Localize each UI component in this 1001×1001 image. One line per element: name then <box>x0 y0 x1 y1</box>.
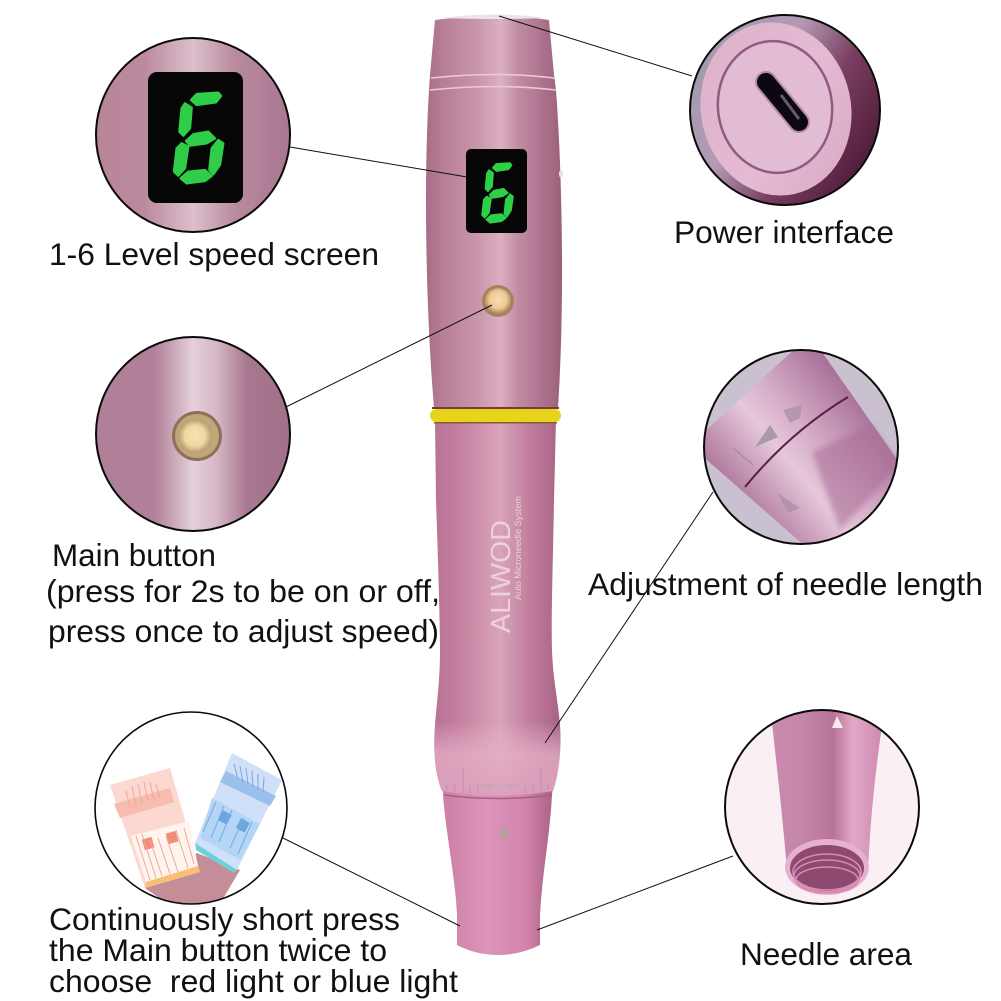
collar seam <box>444 795 552 798</box>
leader lines <box>283 16 733 930</box>
brand logo <box>485 496 524 633</box>
callout: needle length adjustment magnifier <box>703 349 899 545</box>
label: light selection: the Main button twice to <box>49 932 387 968</box>
adjustment collar highlight <box>434 722 561 796</box>
label: speed screen: 1-6 Level speed screen <box>49 236 379 272</box>
label: light selection: Continuously short press <box>49 901 400 937</box>
scale tick <box>733 448 753 465</box>
label: main button: Main button <box>52 537 216 573</box>
callout: main button magnifier <box>96 337 290 531</box>
label: main button: press once to adjust speed) <box>48 613 439 649</box>
red cartridge <box>110 768 200 888</box>
inner ring <box>716 40 834 174</box>
enlarged display <box>148 72 243 203</box>
callout: red and blue light cartridges <box>95 712 287 906</box>
main button on pen <box>482 285 514 317</box>
shaded lower band <box>812 425 900 530</box>
pen upper body <box>426 16 562 408</box>
tilted pen body <box>705 351 896 543</box>
digit 6 <box>482 163 513 223</box>
groove <box>745 397 848 487</box>
label: needle length adjustment: Adjustment of needle length <box>588 566 983 602</box>
label: light selection: choose red light or blue light <box>49 963 458 999</box>
length scale marks <box>447 768 548 794</box>
handles <box>145 853 240 906</box>
yellow rubber ring <box>430 407 561 424</box>
direction triangles <box>755 425 778 447</box>
callout: needle area magnifier <box>725 705 919 904</box>
label: light selection <box>49 901 458 999</box>
enlarged digit 6 <box>174 93 223 183</box>
label: main button: (press for 2s to be on or off, <box>46 573 440 609</box>
label: power interface: Power interface <box>674 214 894 250</box>
cap grooves <box>430 74 556 90</box>
cap top highlight <box>440 14 545 19</box>
enlarged button <box>172 411 222 461</box>
pen nozzle <box>443 785 553 955</box>
nozzle marker <box>499 826 508 837</box>
nozzle arrow mark <box>832 716 843 728</box>
pen lower grip <box>434 420 561 796</box>
speed display on pen <box>466 149 527 233</box>
blue cartridge <box>195 753 282 873</box>
tapered nozzle <box>772 711 882 862</box>
threaded opening <box>785 839 869 895</box>
brand logo: Auto Microneedle System <box>513 496 524 600</box>
brand logo: ALIWOD <box>485 520 516 633</box>
label: main button <box>46 537 440 649</box>
end face <box>700 22 852 196</box>
callout: power interface magnifier <box>685 8 880 210</box>
side marker <box>559 170 563 178</box>
label: needle area: Needle area <box>740 936 912 972</box>
device: pink microneedle pen <box>426 14 563 955</box>
micro USB port <box>766 82 799 122</box>
callout: speed screen magnifier <box>96 38 290 232</box>
